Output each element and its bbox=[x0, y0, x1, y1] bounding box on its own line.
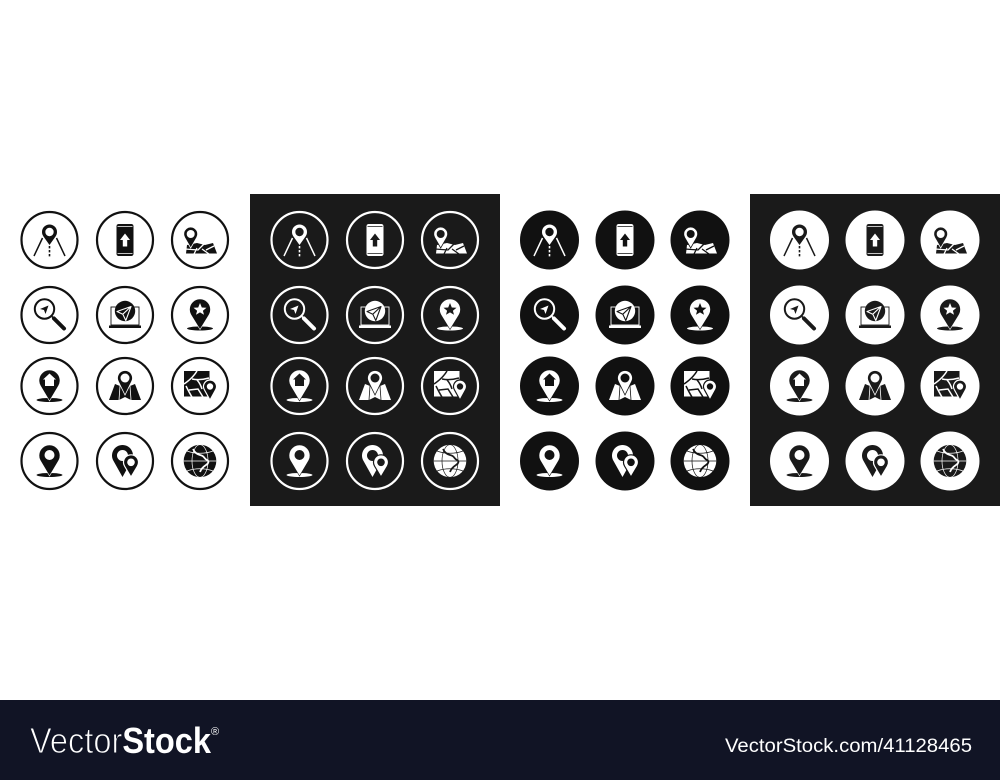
logo: VectorStock: VectorStock bbox=[30, 720, 212, 761]
icon: pin with roads bbox=[770, 210, 829, 270]
icon: house pin bbox=[770, 356, 829, 416]
icon: phone with up arrow bbox=[347, 212, 403, 268]
icon: laptop with navigation bbox=[347, 287, 403, 343]
icon: laptop with navigation bbox=[97, 287, 153, 343]
icon: location pin bbox=[520, 432, 579, 490]
icon: phone with up arrow bbox=[596, 210, 654, 270]
icon: double pins bbox=[347, 433, 403, 489]
icon: pin on map bbox=[670, 210, 730, 270]
icon: globe with route bbox=[920, 432, 980, 490]
icon: magnifier with arrow bbox=[22, 287, 78, 343]
panel: dark icons in white discs on dark bbox=[750, 194, 1000, 506]
icon: city map with pin bbox=[920, 356, 980, 416]
icon: star pin bbox=[172, 287, 228, 343]
icon: pin with roads bbox=[272, 212, 328, 268]
icon: magnifier with arrow bbox=[770, 286, 829, 344]
icon: pin with roads bbox=[22, 212, 78, 268]
icon: globe with route bbox=[422, 433, 478, 489]
icon: globe with route bbox=[172, 433, 228, 489]
icon: magnifier with arrow bbox=[272, 287, 328, 343]
panel: outlined black icons on white bbox=[22, 212, 228, 489]
icon: star pin bbox=[670, 286, 730, 344]
icon: house pin bbox=[520, 356, 579, 416]
icon: magnifier with arrow bbox=[520, 286, 579, 344]
icon: house pin bbox=[272, 358, 328, 414]
panel: white icons in black discs bbox=[520, 210, 730, 490]
footer bar bbox=[0, 700, 1000, 780]
icon: star pin bbox=[920, 286, 980, 344]
icon: location pin bbox=[770, 432, 829, 490]
panel: outlined white icons on dark bbox=[250, 194, 500, 506]
icon: city map with pin bbox=[670, 356, 730, 416]
icon: phone with up arrow bbox=[846, 210, 904, 270]
icon: folded map pin bbox=[596, 356, 654, 416]
icon: double pins bbox=[846, 432, 904, 490]
icon: city map with pin bbox=[172, 358, 228, 414]
icon: double pins bbox=[596, 432, 654, 490]
icon: folded map pin bbox=[846, 356, 904, 416]
icon: laptop with navigation bbox=[596, 286, 654, 344]
icon: laptop with navigation bbox=[846, 286, 904, 344]
icon: pin on map bbox=[172, 212, 228, 268]
text: image id url: VectorStock.com/41128465 bbox=[725, 736, 972, 757]
icon: pin with roads bbox=[520, 210, 579, 270]
icon: star pin bbox=[422, 287, 478, 343]
icon: pin on map bbox=[920, 210, 980, 270]
icon: location pin bbox=[22, 433, 78, 489]
icon: phone with up arrow bbox=[97, 212, 153, 268]
icon: double pins bbox=[97, 433, 153, 489]
icon: globe with route bbox=[670, 432, 730, 490]
icon: folded map pin bbox=[347, 358, 403, 414]
logo: registered mark: ® bbox=[211, 726, 219, 738]
icon: location pin bbox=[272, 433, 328, 489]
icon: house pin bbox=[22, 358, 78, 414]
icon: city map with pin bbox=[422, 358, 478, 414]
icon: folded map pin bbox=[97, 358, 153, 414]
icon: pin on map bbox=[422, 212, 478, 268]
